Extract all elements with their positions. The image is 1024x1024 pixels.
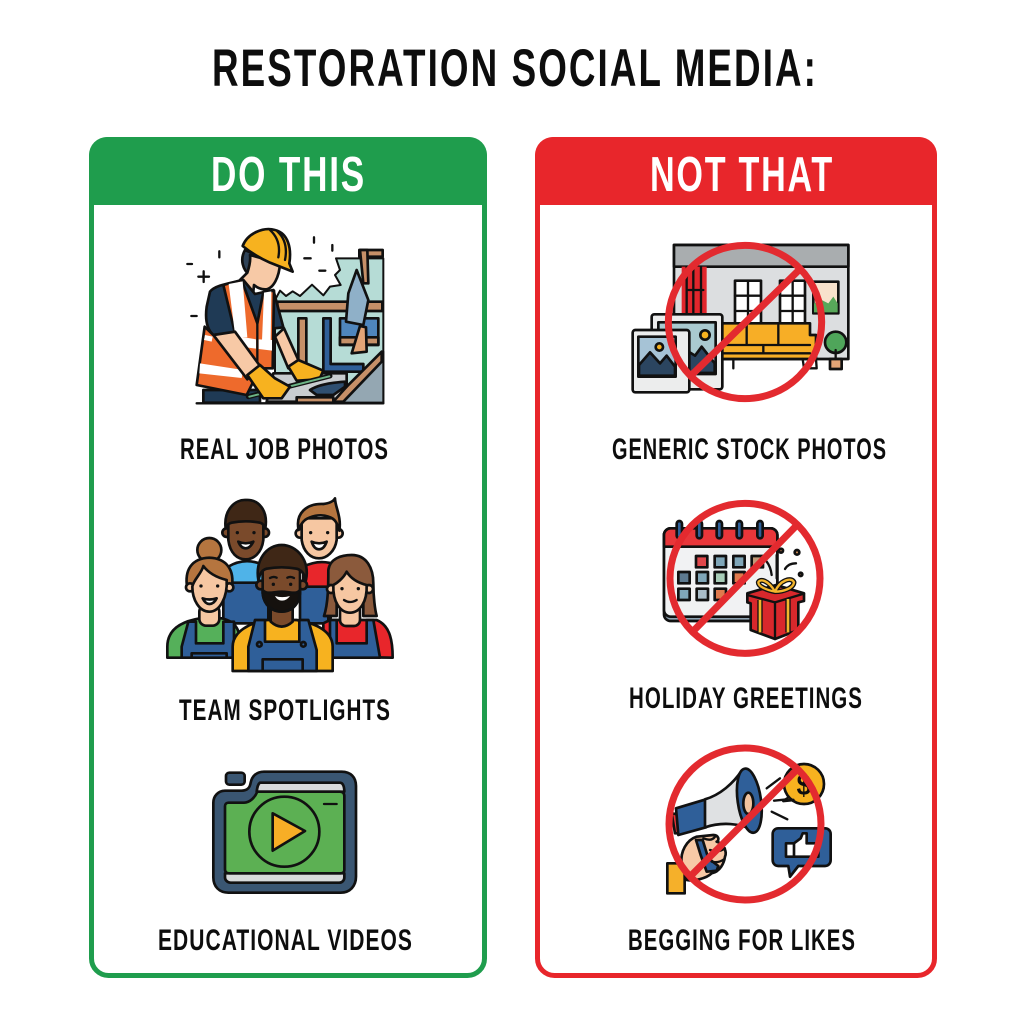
label: holiday greetings: HOLIDAY GREETINGS xyxy=(629,682,863,715)
prohibition sign xyxy=(669,748,821,900)
person: back left xyxy=(222,500,270,623)
icon: crossed out stock photos xyxy=(633,245,848,399)
icon: crossed out megaphone begging for likes xyxy=(667,748,831,900)
label: begging for likes: BEGGING FOR LIKES xyxy=(628,924,856,957)
label: educational videos: EDUCATIONAL VIDEOS xyxy=(158,924,413,957)
person: front right woman xyxy=(323,555,393,658)
person: front centre bearded man xyxy=(233,545,333,671)
panel: not that xyxy=(535,137,937,976)
prohibition sign xyxy=(668,245,822,399)
heading: not that: NOT THAT xyxy=(650,148,834,202)
icon: construction worker at job site xyxy=(187,229,383,403)
icon: crossed out megaphone begging for likes: $ xyxy=(797,769,811,802)
heading: do this: DO THIS xyxy=(211,148,366,202)
person: front left woman xyxy=(167,538,242,658)
label: generic stock photos: GENERIC STOCK PHOTOS xyxy=(612,433,887,466)
label: real job photos: REAL JOB PHOTOS xyxy=(180,433,389,466)
label: team spotlights: TEAM SPOTLIGHTS xyxy=(179,694,391,727)
icon: camera with video play button xyxy=(213,772,356,893)
icon: crossed out holiday calendar and gift xyxy=(664,503,820,653)
person: back right xyxy=(296,498,343,623)
panel: do this xyxy=(89,137,487,976)
icon: team of five workers xyxy=(167,498,393,671)
prohibition sign xyxy=(670,503,820,653)
